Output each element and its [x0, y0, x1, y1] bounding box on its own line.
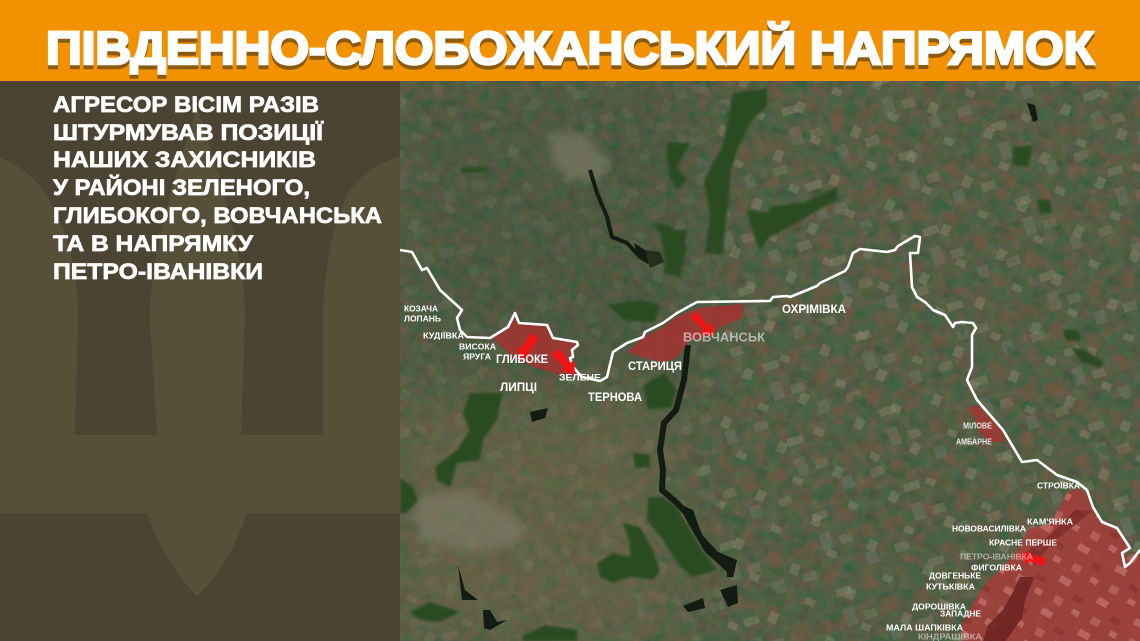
map labels: ФИГОЛІВКА [971, 564, 1022, 572]
panel text: ШТУРМУВАВ ПОЗИЦІЇ [53, 120, 324, 145]
map labels: ДОРОШІВКА [912, 602, 966, 612]
panel text: У РАЙОНІ ЗЕЛЕНОГО, [53, 175, 310, 200]
map labels: ЛИПЦІ [500, 382, 537, 394]
arrow: Vovchansk [690, 312, 714, 336]
map labels [404, 304, 1080, 641]
map labels: ВОВЧАНСЬК [683, 330, 765, 344]
map labels: ТЕРНОВА [588, 392, 642, 404]
panel text: ГЛИБОКОГО, ВОВЧАНСЬКА [53, 203, 382, 228]
map labels: ЯРУГА [463, 352, 491, 362]
map labels: ВИСОКА [459, 342, 496, 352]
occupied zone: Milove [968, 405, 1005, 442]
panel text: ПЕТРО-ІВАНІВКИ [53, 259, 263, 284]
map labels: ПЕТРО-ІВАНІВКА [960, 552, 1033, 562]
map labels: ОХРІМІВКА [782, 304, 846, 316]
map labels: КОЗАЧА [404, 304, 438, 314]
front line [400, 236, 1140, 567]
occupied zone: Vovchansk [627, 304, 743, 363]
rivers and reservoirs [458, 103, 1038, 630]
map labels: МАЛА ШАПКІВКА [886, 624, 963, 632]
map labels: ЛОПАНЬ [404, 314, 441, 324]
panel text: АГРЕСОР ВІСІМ РАЗІВ [53, 92, 319, 117]
map labels: КУТЬКІВКА [926, 582, 975, 592]
occupied zone: south-east [960, 485, 1140, 641]
arrow: Zelene [551, 349, 575, 374]
map labels: КУДІЇВКА [423, 332, 464, 340]
map labels: ЗЕЛЕНЕ [559, 372, 601, 384]
map labels: МІЛОВЕ [963, 422, 993, 430]
arrow: Petro-Ivanivka [1019, 551, 1046, 566]
cities [417, 130, 608, 552]
title: ПІВДЕННО-СЛОБОЖАНСЬКИЙ НАПРЯМОК [46, 26, 1095, 78]
map labels: ДОВГЕНЬКЕ [929, 572, 982, 580]
map labels: СТАРИЦЯ [628, 361, 682, 373]
panel text: НАШИХ ЗАХИСНИКІВ [53, 147, 316, 172]
left text panel [0, 81, 400, 641]
forests [400, 88, 1104, 641]
map labels: СТРОЇВКА [1037, 482, 1080, 490]
map labels: АМБАРНЕ [956, 438, 993, 446]
occupied zone: Hlyboke [493, 313, 582, 377]
map panel [400, 81, 1140, 641]
trident watermark [0, 108, 400, 596]
title: ПІВДЕННО-СЛОБОЖАНСЬКИЙ НАПРЯМОК [46, 22, 1095, 74]
map labels: КАМ'ЯНКА [1027, 518, 1073, 526]
panel text [53, 92, 382, 284]
map labels: ЗАПАДНЕ [940, 610, 982, 618]
map labels: КРАСНЕ ПЕРШЕ [989, 538, 1058, 548]
panel text: ТА В НАПРЯМКУ [53, 231, 253, 256]
map labels: ГЛИБОКЕ [496, 354, 548, 366]
header banner [0, 0, 1140, 81]
arrow: Hlyboke [517, 333, 539, 360]
map labels: НОВОВАСИЛІВКА [952, 524, 1026, 534]
